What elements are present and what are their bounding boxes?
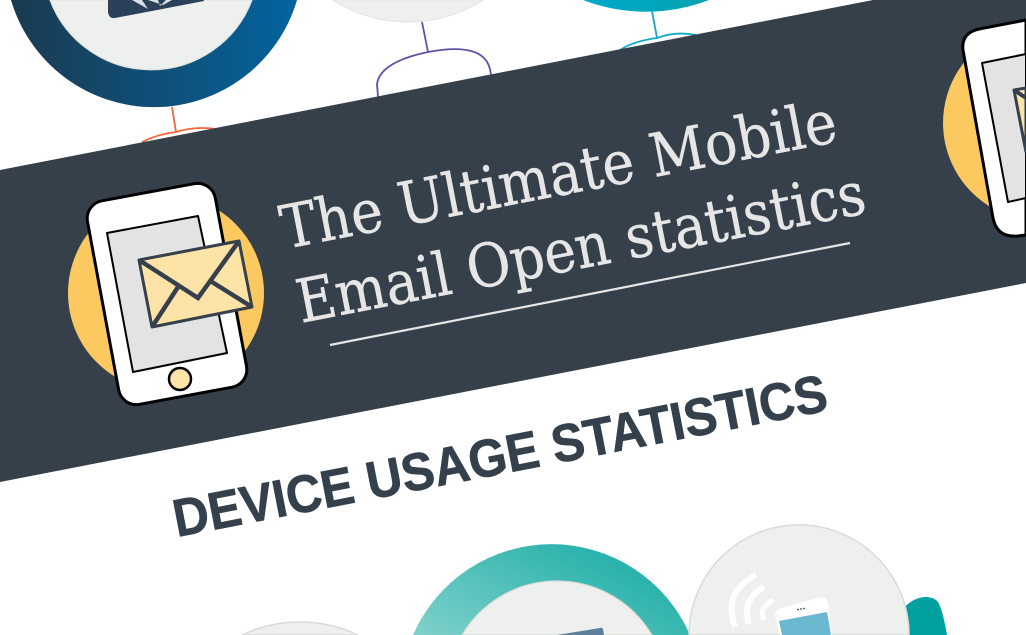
icon: second phone with envelope, cropped at edge (943, 20, 1026, 236)
grey circle with phone signal icon (689, 525, 909, 635)
icon: business person (108, 0, 204, 18)
title: The Ultimate Mobile (275, 87, 842, 264)
orange connector (142, 107, 216, 142)
teal tab (903, 597, 947, 635)
top cyan circle (583, 0, 709, 12)
title: Email Open statistics (291, 159, 871, 338)
cyan connector (620, 11, 696, 50)
bottom left grey circle (242, 622, 358, 635)
teal ring with tablet icon (413, 544, 690, 635)
title underline (330, 243, 850, 345)
icon: smartphone (775, 597, 832, 635)
heading: DEVICE USAGE STATISTICS (168, 364, 832, 549)
icon: phone with envelope (68, 180, 264, 408)
title (275, 87, 871, 338)
icon: tablet (557, 628, 604, 635)
purple connector (377, 22, 491, 97)
top grey circle (333, 0, 483, 22)
icon: envelope (139, 241, 252, 327)
dark title banner (0, 0, 1026, 482)
icon: signal waves (731, 575, 773, 627)
top navy ring with business icon (11, 0, 297, 107)
